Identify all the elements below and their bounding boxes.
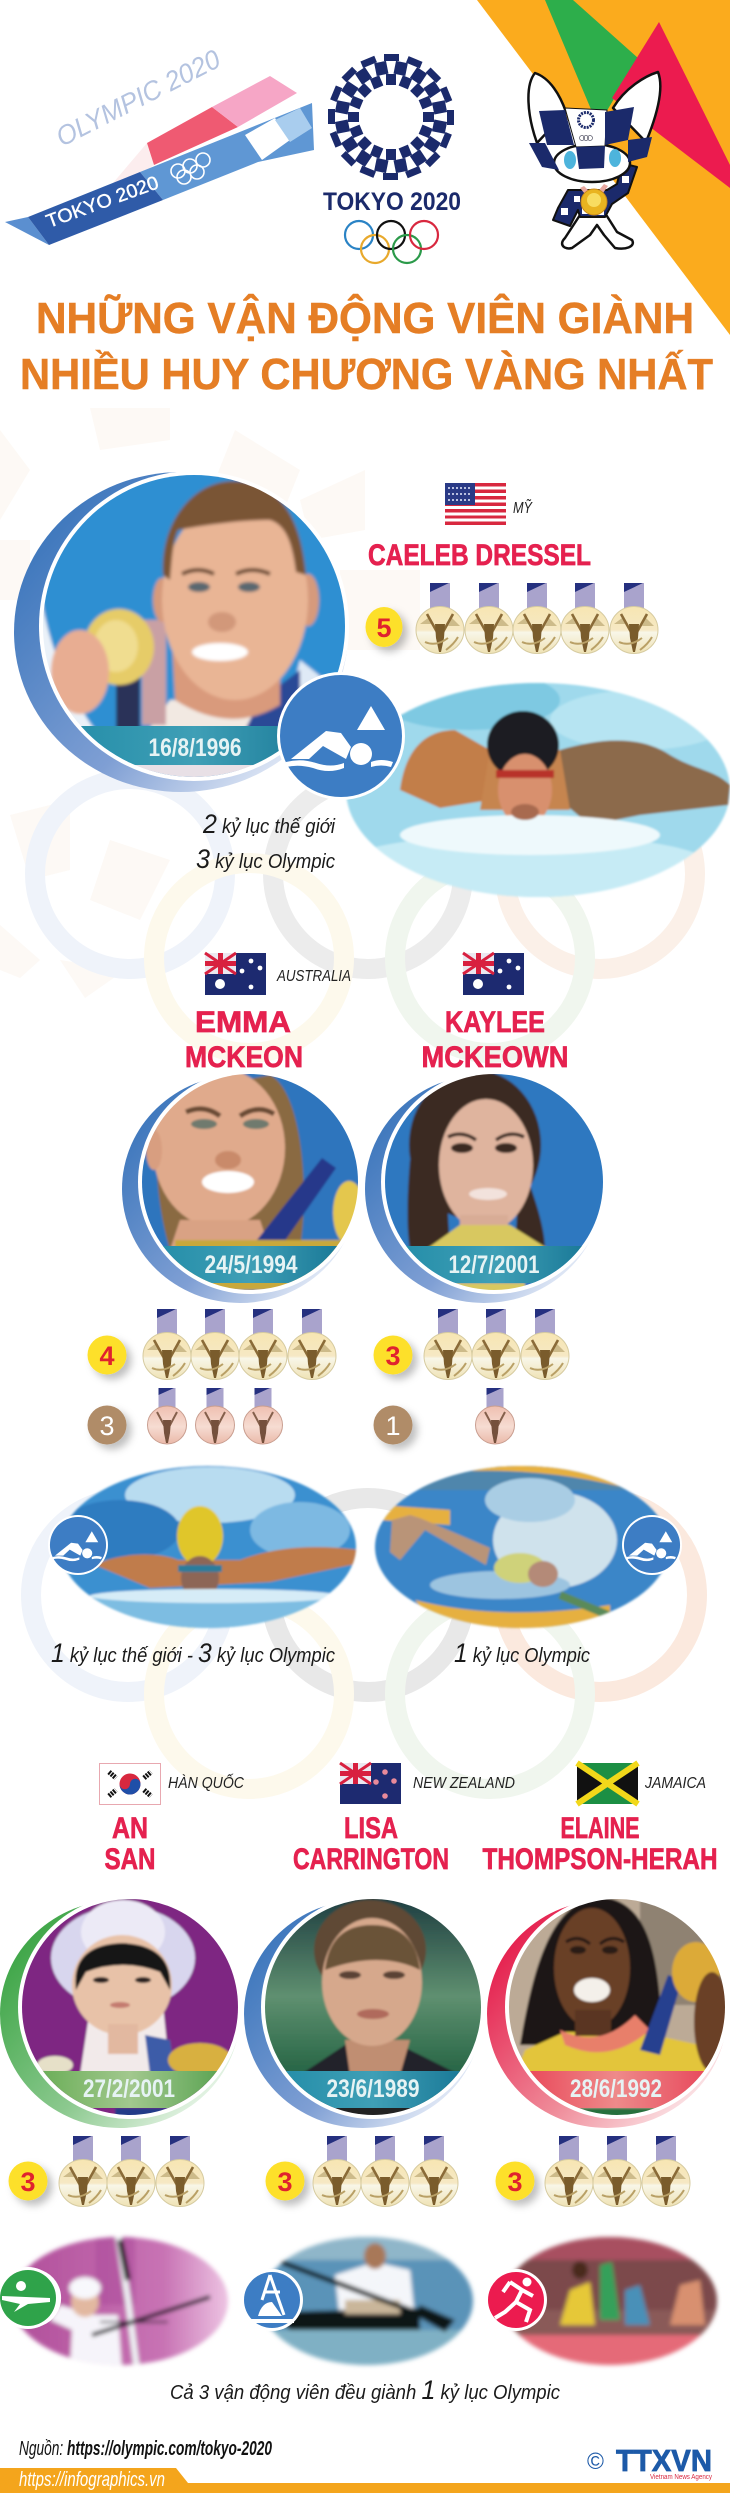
action photo: swimming butterfly — [335, 670, 730, 902]
panel: Emma McKeon — [48, 953, 365, 1668]
logo: TTXVN: TTXVN — [616, 2443, 712, 2478]
icon: swimming — [277, 672, 405, 800]
title: NHỮNG VẬN ĐỘNG VIÊN GIÀNH — [36, 292, 694, 343]
medal count badge: gold — [374, 1336, 412, 1374]
flag: South Korea — [100, 1764, 160, 1804]
name: CAELEB DRESSEL — [368, 539, 591, 572]
medal count badge: gold: 4 — [99, 1341, 115, 1371]
portrait: Emma McKeon: 24/5/1994 — [204, 1251, 298, 1279]
name — [482, 1812, 718, 1876]
logo: TTXVN: Vietnam News Agency — [650, 2474, 712, 2481]
country: JAMAICA — [644, 1775, 706, 1792]
medal count badge — [366, 607, 402, 647]
name — [104, 1812, 156, 1876]
portrait: Caeleb Dressel: 16/8/1996 — [148, 734, 242, 762]
title: NHIỀU HUY CHƯƠNG VÀNG NHẤT — [20, 349, 713, 399]
country: AUSTRALIA — [276, 968, 351, 985]
date band — [406, 1246, 582, 1283]
action photo: sprint — [500, 2235, 720, 2370]
flag: USA — [445, 483, 506, 525]
icon: swimming — [622, 1515, 682, 1575]
corner graphic: orange green red shapes — [477, 0, 730, 335]
action photo: canoe — [258, 2235, 478, 2370]
records: 2 kỷ lục thế giới — [202, 809, 336, 839]
logo: TTXVN — [587, 2443, 712, 2481]
ribbon graphic with Olympic 2020 — [5, 44, 314, 245]
gold medals — [416, 583, 658, 654]
ribbon graphic with Olympic 2020: TOKYO 2020 — [44, 173, 162, 233]
flag: Jamaica — [577, 1763, 638, 1804]
source: Nguồn: https://olympic.com/tokyo-2020 — [19, 2438, 272, 2460]
date band — [163, 1246, 337, 1283]
portrait: An San: 27/2/2001 — [83, 2075, 175, 2103]
panel: Lisa Carrington — [241, 1763, 515, 2370]
medal count badge: bronze: 3 — [99, 1411, 115, 1441]
icon: athletics — [485, 2269, 547, 2331]
panel: Caeleb Dressel — [14, 470, 730, 902]
action photo: backstroke — [372, 1459, 672, 1635]
action photo: archery — [10, 2235, 230, 2370]
background: faint Olympic rings upper — [35, 779, 695, 1053]
name — [185, 1006, 303, 1074]
gold medals — [143, 1309, 336, 1380]
country: NEW ZEALAND — [413, 1775, 515, 1792]
panel: Elaine Thompson-Herah — [482, 1763, 730, 2370]
footer bar — [0, 2468, 730, 2493]
portrait: Elaine Thompson-Herah — [487, 1895, 730, 2128]
medal count badge: bronze — [88, 1406, 126, 1444]
records: 1 kỷ lục Olympic — [454, 1638, 590, 1668]
medal count badge: gold — [88, 1336, 126, 1374]
icon: swimming — [48, 1515, 108, 1575]
Olympic rings logo — [345, 221, 438, 263]
ribbon graphic with Olympic 2020: OLYMPIC 2020 — [51, 44, 225, 152]
name: MCKEON — [185, 1041, 303, 1074]
name — [422, 1006, 568, 1074]
background: faint checker pattern — [0, 408, 420, 998]
flag: Australia — [205, 953, 266, 995]
date band — [286, 2071, 460, 2108]
portrait: Emma McKeon — [122, 1068, 365, 1303]
date band — [530, 2071, 704, 2108]
portrait: Kaylee McKeown: 12/7/2001 — [448, 1251, 540, 1279]
portrait: An San — [0, 1895, 242, 2128]
flag: New Zealand — [340, 1763, 401, 1804]
medal count badge: 3 — [507, 2167, 523, 2197]
records: 3 kỷ lục Olympic — [196, 844, 335, 874]
medal count badge: 5 — [376, 613, 392, 643]
name — [293, 1812, 449, 1876]
footer bar: https://infographics.vn — [19, 2469, 165, 2491]
medal count badge — [496, 2162, 534, 2200]
name: AN — [112, 1812, 148, 1845]
date band — [81, 726, 279, 765]
date band — [43, 2071, 217, 2108]
portrait: Kaylee McKeown — [365, 1070, 607, 1303]
name: CARRINGTON — [293, 1843, 449, 1876]
mascot Miraitowa — [528, 72, 660, 249]
country: HÀN QUỐC — [168, 1773, 244, 1792]
Tokyo 2020 wordmark: TOKYO 2020 — [323, 188, 461, 216]
panel: Kaylee McKeown — [365, 953, 682, 1668]
gold medals — [59, 2136, 204, 2206]
panel: An San — [0, 1764, 244, 2370]
summary note: Cả 3 vận động viên đều giành 1 kỷ lục Olympic — [170, 2375, 560, 2405]
name: MCKEOWN — [422, 1041, 568, 1074]
portrait: Lisa Carrington — [244, 1895, 485, 2128]
action photo: butterfly — [66, 1464, 358, 1630]
name: SAN — [104, 1843, 156, 1876]
logo: TTXVN: © — [587, 2448, 604, 2474]
country: MỸ — [513, 497, 533, 517]
records: 1 kỷ lục thế giới - 3 kỷ lục Olympic — [51, 1638, 335, 1668]
medal count badge: 3 — [20, 2167, 36, 2197]
name: ELAINE — [560, 1812, 640, 1845]
gold medals — [313, 2136, 458, 2206]
portrait: Lisa Carrington: 23/6/1989 — [326, 2075, 420, 2103]
background: faint Olympic rings lower — [31, 1498, 697, 1789]
medal count badge — [8, 2162, 48, 2200]
bronze medals — [148, 1388, 282, 1444]
records — [196, 809, 336, 874]
name: LISA — [344, 1812, 398, 1845]
medal count badge: 3 — [277, 2167, 293, 2197]
bronze medal — [476, 1388, 514, 1444]
medal count badge: bronze — [374, 1406, 412, 1444]
name: EMMA — [195, 1006, 291, 1039]
medal count badge — [266, 2162, 304, 2200]
Tokyo 2020 emblem checker ring — [328, 54, 454, 180]
medal count badge: gold: 3 — [385, 1341, 401, 1371]
portrait: Caeleb Dressel — [14, 470, 350, 792]
icon: archery — [0, 2267, 60, 2329]
portrait: Elaine Thompson-Herah: 28/6/1992 — [570, 2075, 662, 2103]
gold medals — [424, 1309, 569, 1380]
gold medals — [545, 2136, 690, 2206]
flag: Australia — [463, 953, 524, 995]
title — [20, 292, 713, 399]
name: KAYLEE — [445, 1006, 545, 1039]
medal count badge: bronze: 1 — [385, 1411, 401, 1441]
icon: canoe — [241, 2269, 303, 2331]
